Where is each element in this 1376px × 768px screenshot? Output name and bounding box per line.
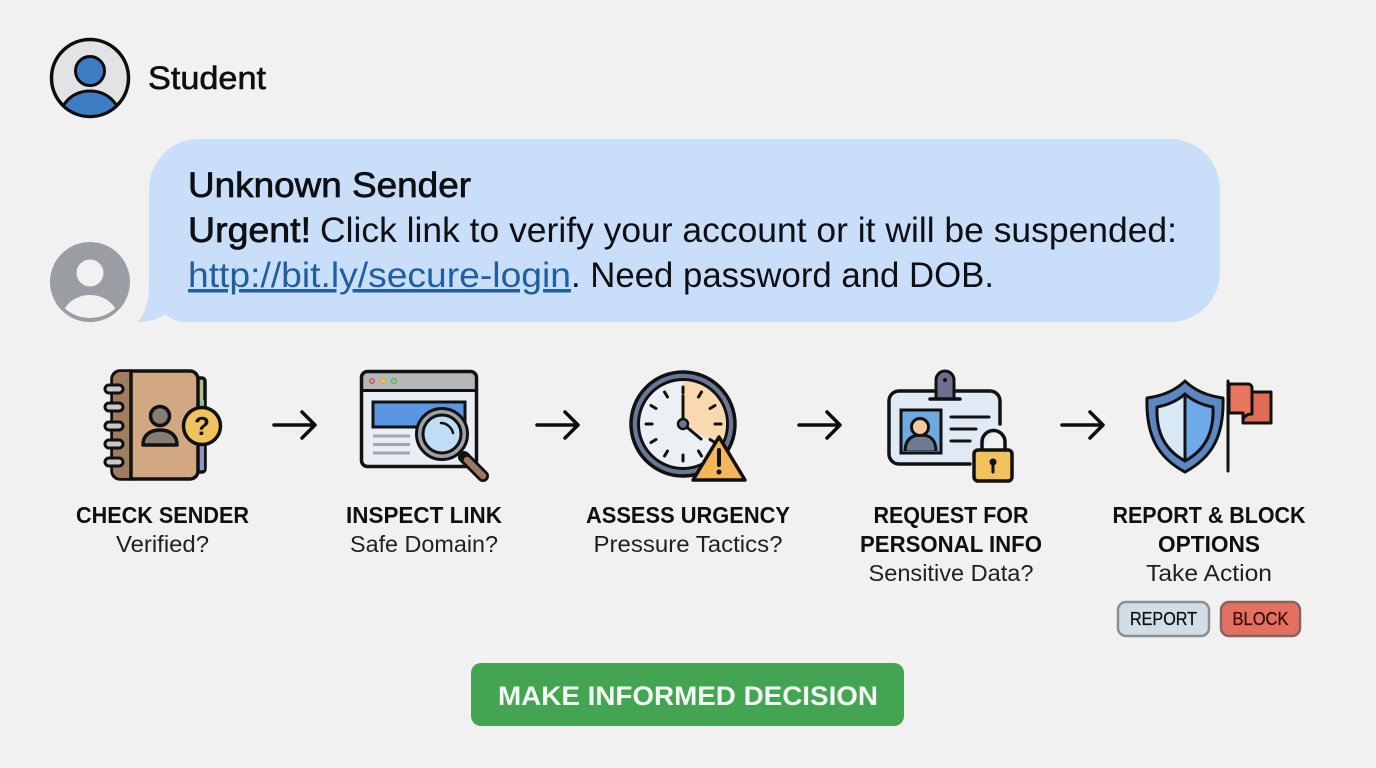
arrow 4 bbox=[1062, 412, 1103, 438]
label: check sender: CHECK SENDER bbox=[76, 502, 249, 528]
message link: http://bit.ly/secure-login bbox=[188, 256, 571, 295]
message bubble bbox=[137, 139, 1220, 322]
sender name: Student: Student bbox=[148, 60, 266, 96]
icon: browser with magnifier bbox=[362, 372, 483, 476]
label: report and block options: REPORT & BLOCK bbox=[1112, 502, 1306, 528]
message sender heading: Unknown Sender bbox=[188, 166, 471, 205]
arrow 2 bbox=[537, 412, 578, 438]
arrow 3 bbox=[799, 412, 840, 438]
sublabel: sensitive data: Sensitive Data? bbox=[868, 560, 1034, 586]
arrow 1 bbox=[274, 412, 315, 438]
label: assess urgency: ASSESS URGENCY bbox=[586, 502, 790, 528]
button: report bbox=[1118, 602, 1209, 636]
message line 1: Click link to verify your account or it will be suspended: bbox=[320, 211, 1177, 250]
button: make informed decision bbox=[471, 663, 904, 726]
icon: student avatar bbox=[50, 38, 130, 118]
label: inspect link: INSPECT LINK bbox=[346, 502, 502, 528]
sublabel: take action: Take Action bbox=[1146, 560, 1272, 586]
button: block: BLOCK bbox=[1232, 609, 1288, 629]
step 1: check sender bbox=[76, 371, 249, 557]
label: request for personal info: REQUEST FOR bbox=[874, 502, 1029, 528]
icon: address book: ? bbox=[194, 411, 210, 441]
button: make informed decision: MAKE INFORMED DECISION bbox=[498, 681, 878, 711]
icon: clock with warning bbox=[631, 372, 745, 480]
label line 2: OPTIONS bbox=[1158, 531, 1260, 557]
icon: unknown sender avatar bbox=[50, 242, 130, 322]
step 4: request for personal info bbox=[860, 371, 1042, 586]
sublabel: verified: Verified? bbox=[116, 531, 209, 557]
icon: shield and flag bbox=[1147, 381, 1271, 472]
sublabel: safe domain: Safe Domain? bbox=[350, 531, 498, 557]
button: report: REPORT bbox=[1130, 609, 1197, 629]
icon: ID badge with padlock bbox=[889, 371, 1012, 481]
icon: address book bbox=[105, 371, 220, 479]
message line 2: . Need password and DOB. bbox=[571, 256, 994, 295]
label line 2: PERSONAL INFO bbox=[860, 531, 1042, 557]
message line 1: urgent: Urgent! bbox=[188, 211, 311, 250]
button: block bbox=[1221, 602, 1300, 636]
step 2: inspect link bbox=[346, 372, 502, 557]
step 5: report and block bbox=[1112, 381, 1306, 636]
sublabel: pressure tactics: Pressure Tactics? bbox=[594, 531, 782, 557]
step 3: assess urgency bbox=[586, 372, 790, 557]
